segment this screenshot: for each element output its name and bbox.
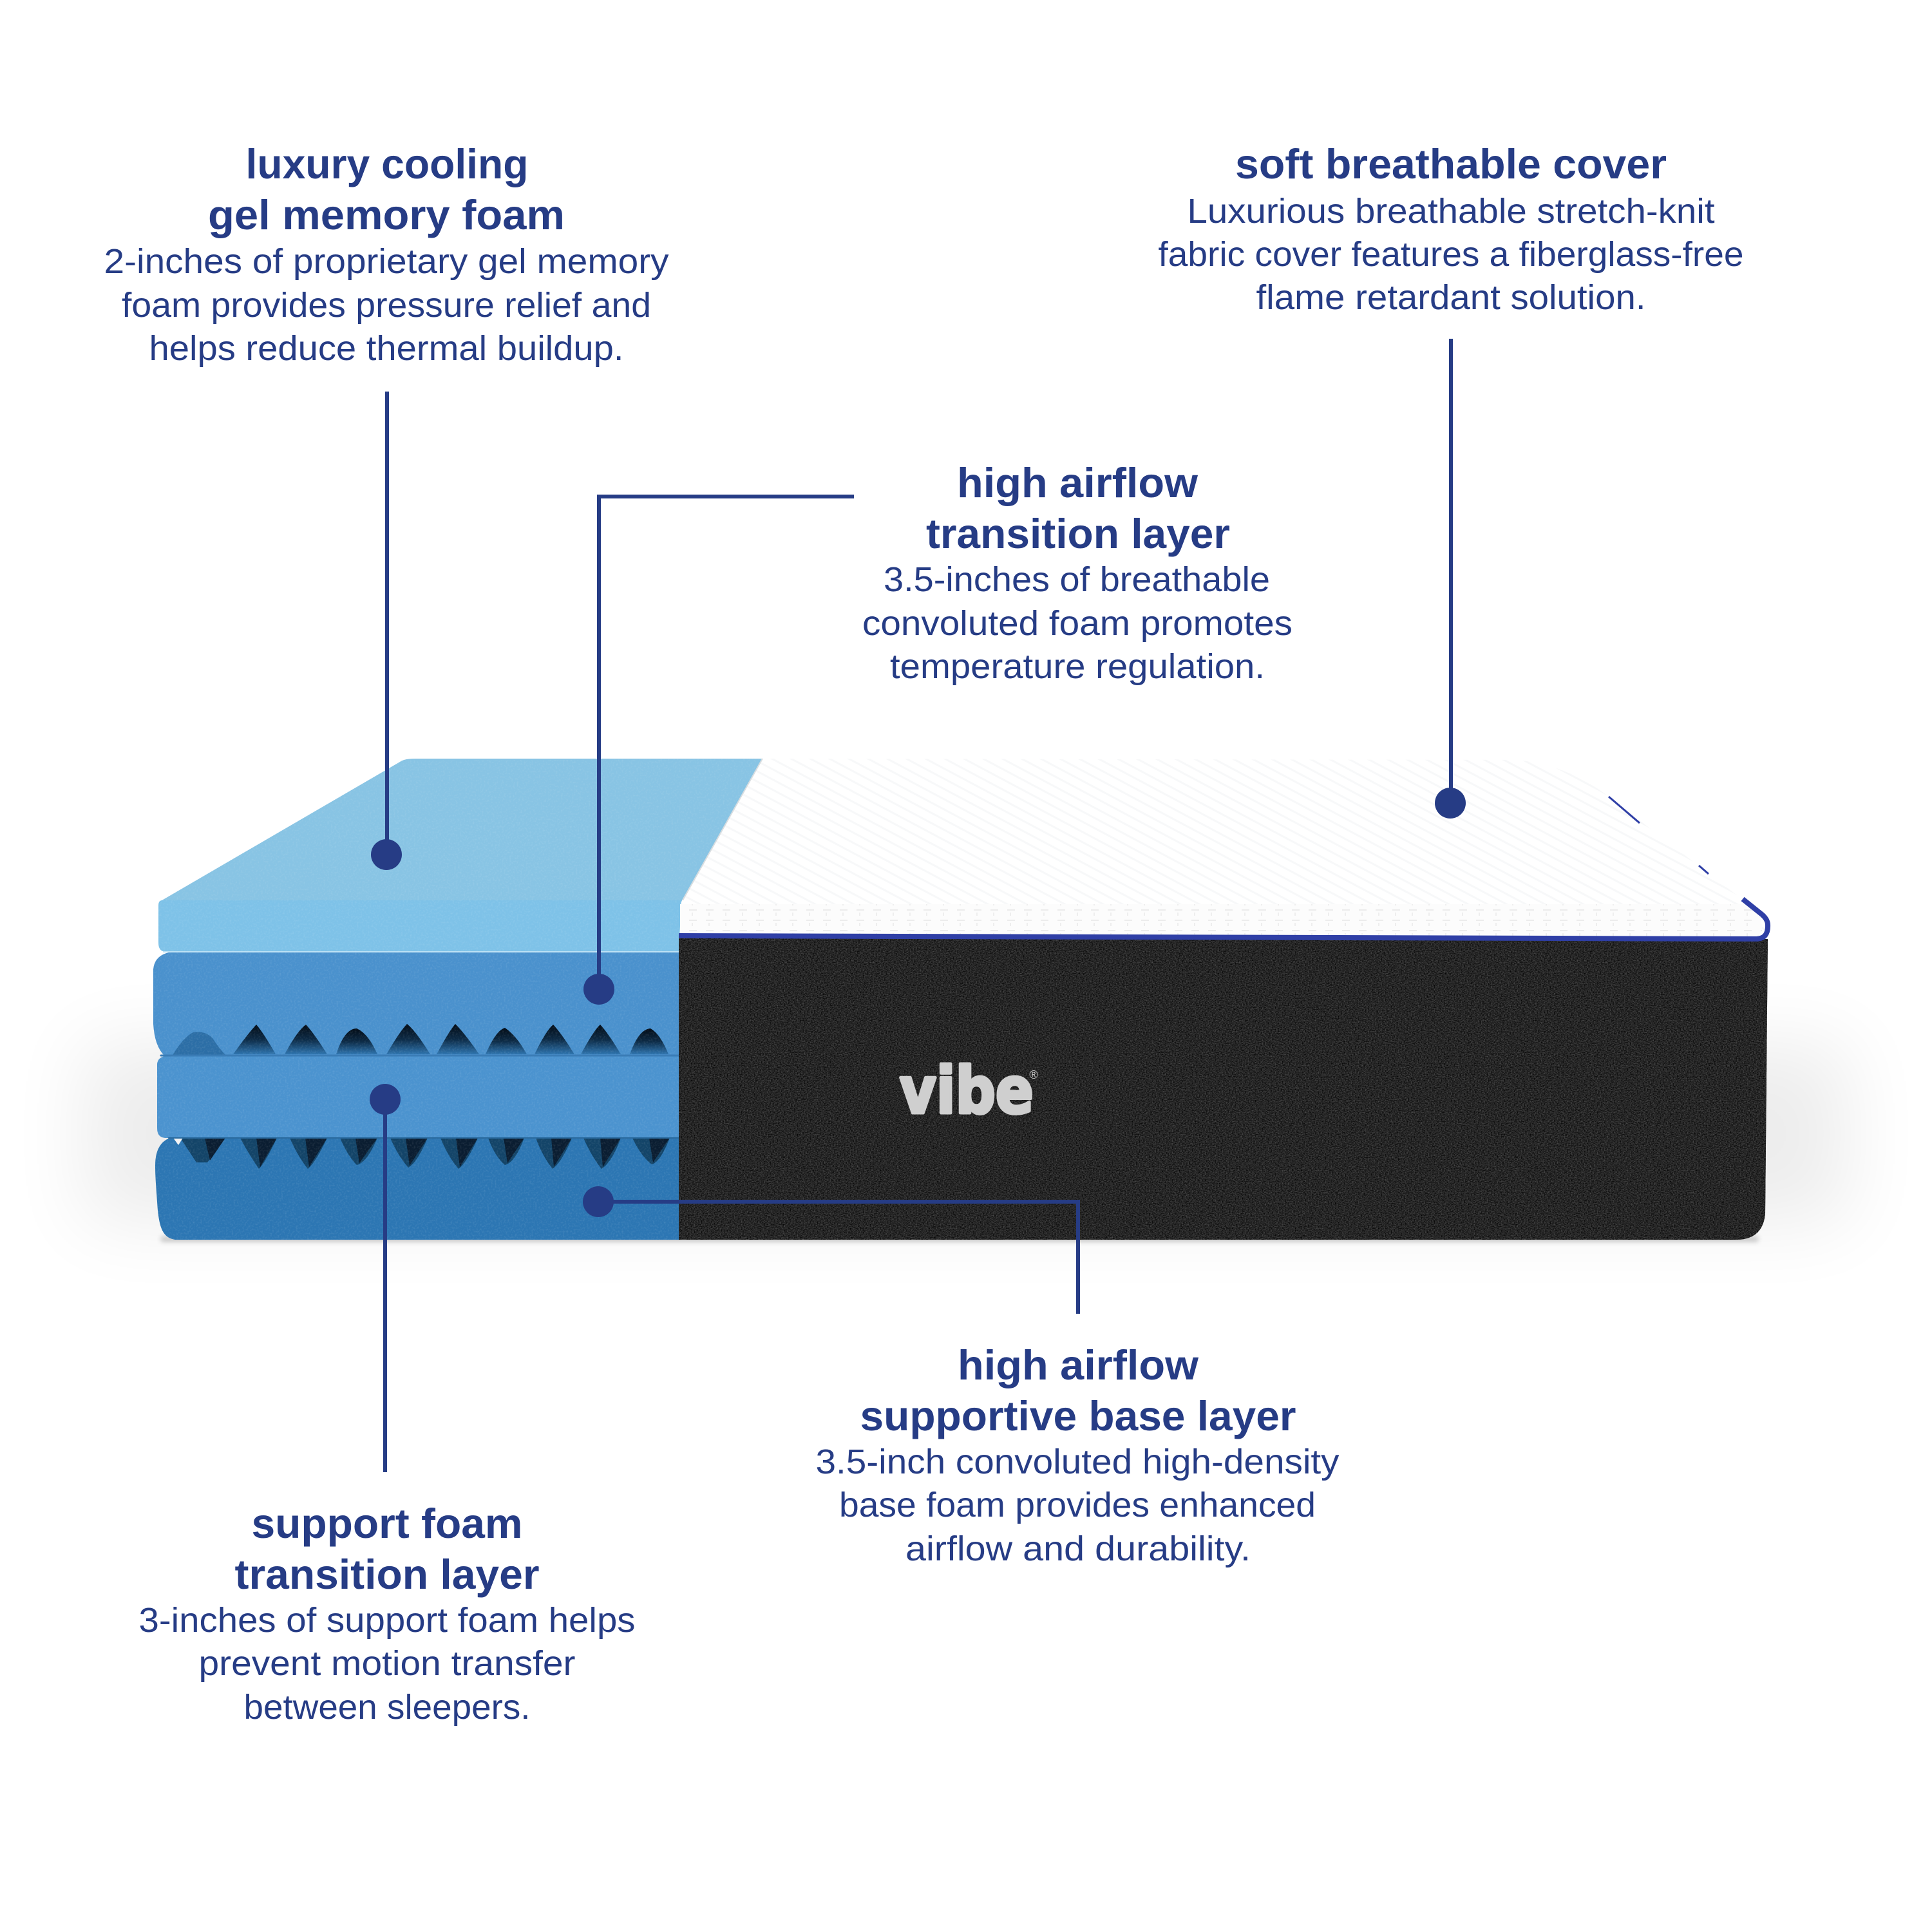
description: airflow and durability. bbox=[905, 1530, 1251, 1568]
fabric side panel bbox=[679, 934, 1770, 1243]
foam layer 4: high airflow supportive base layer bbox=[155, 1138, 679, 1240]
callout: support foam transition layer bbox=[139, 1500, 635, 1727]
description: foam provides pressure relief and bbox=[122, 286, 651, 325]
foam layer 1: luxury cooling gel memory foam bbox=[158, 759, 764, 952]
foam layer separators bbox=[161, 952, 679, 1138]
foam layer 3: support foam transition layer bbox=[157, 1056, 679, 1138]
description: 3.5-inch convoluted high-density bbox=[815, 1443, 1340, 1481]
description: Luxurious breathable stretch-knit bbox=[1188, 192, 1714, 231]
description: temperature regulation. bbox=[890, 647, 1265, 686]
leader: transition layer bbox=[583, 497, 854, 1005]
heading: transition layer bbox=[234, 1551, 540, 1598]
left notch bbox=[172, 1032, 227, 1056]
left notch bbox=[173, 1138, 183, 1145]
callout: high airflow transition layer bbox=[862, 459, 1293, 686]
description: 2-inches of proprietary gel memory bbox=[104, 242, 668, 281]
description: prevent motion transfer bbox=[198, 1644, 576, 1683]
description bbox=[862, 560, 1293, 686]
tooth shadows bbox=[205, 1138, 670, 1167]
heading bbox=[234, 1500, 540, 1598]
heading: high airflow bbox=[957, 459, 1198, 506]
leader: support foam bbox=[370, 1084, 401, 1472]
heading: support foam bbox=[251, 1500, 523, 1547]
foam grain bbox=[148, 753, 773, 1243]
callout: soft breathable cover bbox=[1158, 140, 1744, 317]
description bbox=[815, 1443, 1340, 1568]
convoluted teeth, lower bbox=[180, 1138, 670, 1169]
mattress bbox=[148, 753, 1770, 1243]
description: base foam provides enhanced bbox=[839, 1486, 1316, 1524]
description bbox=[104, 242, 668, 368]
heading: soft breathable cover bbox=[1235, 140, 1667, 187]
logo: vibe: ® bbox=[1029, 1068, 1038, 1081]
leader: gel memory foam bbox=[371, 392, 402, 870]
heading bbox=[926, 459, 1230, 557]
logo: vibe: vibe bbox=[900, 1053, 1034, 1128]
description bbox=[139, 1601, 635, 1727]
description: helps reduce thermal buildup. bbox=[149, 329, 624, 368]
heading: supportive base layer bbox=[860, 1392, 1296, 1439]
leader: base layer bbox=[583, 1186, 1078, 1314]
floor shadow bbox=[84, 1043, 1848, 1242]
heading: gel memory foam bbox=[208, 191, 565, 238]
description bbox=[1158, 192, 1744, 317]
description: 3.5-inches of breathable bbox=[884, 560, 1270, 599]
heading bbox=[860, 1341, 1296, 1439]
description: 3-inches of support foam helps bbox=[139, 1601, 635, 1640]
heading bbox=[208, 140, 565, 238]
description: fabric cover features a fiberglass-free bbox=[1158, 235, 1744, 274]
heading: transition layer bbox=[926, 510, 1230, 557]
description: convoluted foam promotes bbox=[862, 604, 1293, 643]
heading: high airflow bbox=[958, 1341, 1198, 1388]
callout: high airflow supportive base layer bbox=[815, 1341, 1340, 1568]
blue piping bbox=[679, 797, 1768, 939]
convoluted teeth, upper bbox=[233, 1024, 668, 1054]
callout: luxury cooling gel memory foam bbox=[104, 140, 668, 368]
heading: luxury cooling bbox=[246, 140, 528, 187]
description: between sleepers. bbox=[243, 1688, 531, 1727]
leader: cover bbox=[1435, 339, 1466, 819]
white cover top bbox=[680, 759, 1768, 937]
description: flame retardant solution. bbox=[1256, 278, 1646, 317]
foam layer 2: high airflow transition layer bbox=[153, 952, 679, 1056]
